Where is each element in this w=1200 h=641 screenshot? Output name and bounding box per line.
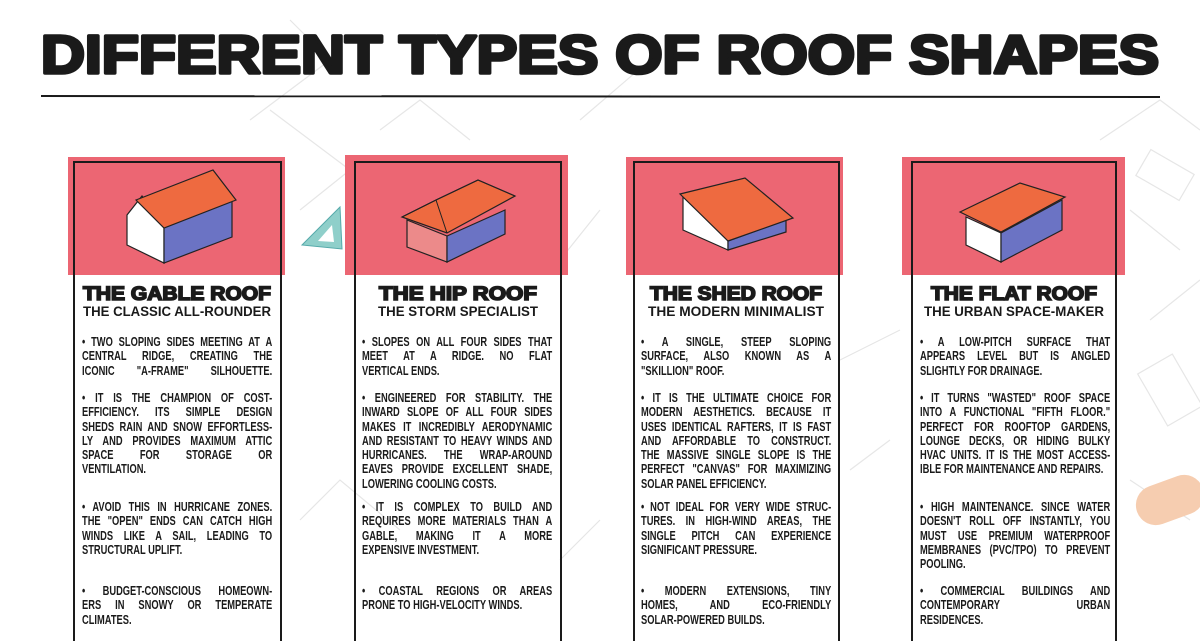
text: pros: INTO A FUNCTIONAL "FIFTH FLOOR."	[920, 405, 1110, 419]
text: cons: WINDS LIKE A SAIL, LEADING TO	[82, 529, 272, 543]
text: pros: SOLAR PANEL EFFICIENCY.	[641, 477, 766, 491]
text: cons: SINGLE PITCH CAN EXPERIENCE	[641, 529, 831, 543]
text: description	[82, 335, 272, 378]
text: pros: HURRICANES. THE WRAP-AROUND	[362, 448, 552, 462]
text: cons: • AVOID THIS IN HURRICANE ZONES.	[82, 500, 272, 514]
text: pros: PERFECT "CANVAS" FOR MAXIMIZING	[641, 462, 831, 476]
text: cons: GABLE, MAKING IT A MORE	[362, 529, 552, 543]
text: pros: • IT IS THE CHAMPION OF COST-	[82, 391, 272, 405]
text: description	[362, 335, 552, 378]
text: cons: MEMBRANES (PVC/TPO) TO PREVENT	[920, 543, 1110, 557]
text: description: • A LOW-PITCH SURFACE THAT	[920, 335, 1110, 349]
panel: hip roof	[345, 155, 568, 641]
icon: set square	[301, 206, 342, 250]
text: best for	[641, 584, 831, 627]
text: pros: VENTILATION.	[82, 462, 146, 476]
text: pros: LOWERING COOLING COSTS.	[362, 477, 497, 491]
text: cons: • HIGH MAINTENANCE. SINCE WATER	[920, 500, 1110, 514]
heading: THE FLAT ROOF	[931, 284, 1097, 305]
text: description: • TWO SLOPING SIDES MEETING AT A	[82, 335, 272, 349]
text: pros: SHEDS RAIN AND SNOW EFFORTLESS-	[82, 420, 272, 434]
text: description: VERTICAL ENDS.	[362, 364, 440, 378]
heading: THE SHED ROOF	[650, 284, 822, 305]
text: pros: PERFECT FOR ROOFTOP GARDENS,	[920, 420, 1110, 434]
text: cons: TURES. IN HIGH-WIND AREAS, THE	[641, 514, 831, 528]
heading	[648, 284, 825, 319]
text: best for: PRONE TO HIGH-VELOCITY WINDS.	[362, 598, 522, 612]
text: pros: IBLE FOR MAINTENANCE AND REPAIRS.	[920, 462, 1103, 476]
text: cons: SIGNIFICANT PRESSURE.	[641, 543, 757, 557]
text: cons: DOESN'T ROLL OFF INSTANTLY, YOU	[920, 514, 1110, 528]
text: description: "SKILLION" ROOF.	[641, 364, 724, 378]
text: pros: EAVES PROVIDE EXCELLENT SHADE,	[362, 462, 552, 476]
text: best for: • COMMERCIAL BUILDINGS AND	[920, 584, 1110, 598]
text: cons	[362, 500, 552, 557]
text: description: ICONIC "A-FRAME" SILHOUETTE.	[82, 364, 272, 378]
heading	[82, 284, 272, 319]
icon: paper roll	[1130, 469, 1200, 531]
text: pros: • ENGINEERED FOR STABILITY. THE	[362, 391, 552, 405]
text: cons: MUST USE PREMIUM WATERPROOF	[920, 529, 1110, 543]
heading: THE MODERN MINIMALIST	[648, 304, 825, 319]
text: best for: CLIMATES.	[82, 613, 132, 627]
heading	[924, 284, 1104, 319]
text: pros: • IT TURNS "WASTED" ROOF SPACE	[920, 391, 1110, 405]
text: pros: EFFICIENCY. ITS SIMPLE DESIGN	[82, 405, 272, 419]
text: cons: REQUIRES MORE MATERIALS THAN A	[362, 514, 552, 528]
text: cons: • NOT IDEAL FOR VERY WIDE STRUC-	[641, 500, 831, 514]
text: cons	[641, 500, 831, 557]
text: description	[920, 335, 1110, 378]
text: pros: INWARD SLOPE OF ALL FOUR SIDES	[362, 405, 552, 419]
text: pros: AND AFFORDABLE TO CONSTRUCT.	[641, 434, 831, 448]
text: description: MEET AT A RIDGE. NO FLAT	[362, 349, 552, 363]
text: best for: CONTEMPORARY URBAN	[920, 598, 1110, 612]
text: description: SLIGHTLY FOR DRAINAGE.	[920, 364, 1042, 378]
heading	[378, 284, 539, 319]
text: best for	[82, 584, 272, 627]
text: best for: • BUDGET-CONSCIOUS HOMEOWN-	[82, 584, 272, 598]
text: pros: SPACE FOR STORAGE OR	[82, 448, 272, 462]
text: pros: MAKES IT INCREDIBLY AERODYNAMIC	[362, 420, 552, 434]
text: best for	[920, 584, 1110, 627]
icon: flat house	[958, 182, 1066, 263]
text: pros: USES IDENTICAL RAFTERS, IT IS FAST	[641, 420, 831, 434]
panel: gable roof	[68, 157, 285, 641]
panel: flat roof	[902, 157, 1200, 641]
icon: gable house	[126, 169, 237, 264]
text: cons	[82, 500, 272, 557]
text: best for: • COASTAL REGIONS OR AREAS	[362, 584, 552, 598]
text: cons	[920, 500, 1110, 571]
text: best for	[362, 584, 552, 612]
text: description: • SLOPES ON ALL FOUR SIDES THAT	[362, 335, 552, 349]
title: DIFFERENT TYPES OF ROOF SHAPES	[41, 25, 1159, 85]
text: description	[641, 335, 831, 378]
text: cons: STRUCTURAL UPLIFT.	[82, 543, 182, 557]
panel: shed roof	[626, 157, 1050, 641]
heading: THE GABLE ROOF	[83, 284, 271, 305]
text: best for: SOLAR-POWERED BUILDS.	[641, 613, 765, 627]
text: pros: HVAC UNITS. IT IS THE MOST ACCESS-	[920, 448, 1110, 462]
heading: THE HIP ROOF	[379, 284, 537, 305]
text: best for: ERS IN SNOWY OR TEMPERATE	[82, 598, 272, 612]
text: cons: • IT IS COMPLEX TO BUILD AND	[362, 500, 552, 514]
text: pros: LOUNGE DECKS, OR HIDING BULKY	[920, 434, 1110, 448]
text: pros: AND RESISTANT TO HEAVY WINDS AND	[362, 434, 552, 448]
text: cons: THE "OPEN" ENDS CAN CATCH HIGH	[82, 514, 272, 528]
text: cons: EXPENSIVE INVESTMENT.	[362, 543, 479, 557]
text: description: • A SINGLE, STEEP SLOPING	[641, 335, 831, 349]
icon: hip house	[400, 179, 516, 263]
heading: THE CLASSIC ALL-ROUNDER	[83, 304, 271, 319]
text: description: CENTRAL RIDGE, CREATING THE	[82, 349, 272, 363]
icon: shed house	[678, 177, 794, 251]
text: pros	[641, 391, 832, 491]
text: pros	[362, 391, 552, 491]
heading: THE STORM SPECIALIST	[378, 304, 539, 319]
text: description: APPEARS LEVEL BUT IS ANGLED	[920, 349, 1110, 363]
text: best for: • MODERN EXTENSIONS, TINY	[641, 584, 831, 598]
text: description: SURFACE, ALSO KNOWN AS A	[641, 349, 831, 363]
text: pros: LY AND PROVIDES MAXIMUM ATTIC	[82, 434, 272, 448]
text: best for: HOMES, AND ECO-FRIENDLY	[641, 598, 831, 612]
text: pros	[920, 391, 1110, 476]
text: best for: RESIDENCES.	[920, 613, 983, 627]
text: pros: • IT IS THE ULTIMATE CHOICE FOR	[641, 391, 831, 405]
heading: THE URBAN SPACE-MAKER	[924, 304, 1104, 319]
text: pros: MODERN AESTHETICS. BECAUSE IT	[641, 405, 831, 419]
text: cons: POOLING.	[920, 557, 966, 571]
text: pros: THE MASSIVE SINGLE SLOPE IS THE	[641, 448, 831, 462]
text: pros	[82, 391, 272, 476]
